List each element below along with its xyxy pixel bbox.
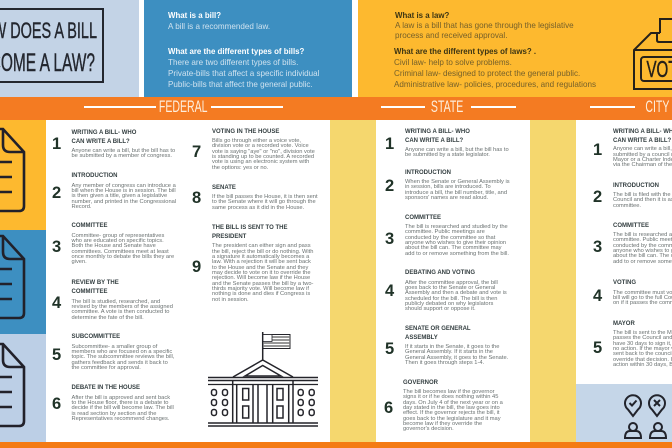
step: state 5: 5 <box>385 340 394 358</box>
step: federal 9: and the Senate passes the bill by a two- <box>212 281 313 287</box>
panel: what is a bill: What are the different types of bills? <box>168 46 304 56</box>
step: state 1: 1 <box>385 135 394 153</box>
step: state 2 <box>385 170 510 201</box>
panel: what is a law: What are the different types of laws? . <box>394 46 536 56</box>
step: federal 6: decide if the bill will become law. The bill <box>72 405 174 411</box>
step: state 5: If it starts in the Senate, it goes to the <box>405 344 499 350</box>
step: federal 3: Committee- group of representatives <box>72 233 164 239</box>
step: state 1 <box>385 128 509 158</box>
step: federal 1: WRITING A BILL- WHO <box>72 130 136 136</box>
step: state 4: should support or oppose it. <box>405 306 476 312</box>
step: state 1: Anyone can write a bill, but the bill has to <box>405 147 509 153</box>
step: state 6: signs it or if he does nothing within 45 <box>403 394 498 400</box>
step: state 5: Then it goes through steps 1-4. <box>405 360 484 366</box>
step: state 4: DEBATING AND VOTING <box>405 270 475 276</box>
panel: what is a law: A law is a bill that has gone through the legislative <box>395 20 574 30</box>
step: state 6: days. On July 4 of the next year or on a <box>403 400 503 406</box>
step: federal 5: gathers feedback and sends it back to <box>72 360 168 366</box>
step: state 6: GOVERNOR <box>403 380 438 386</box>
step: federal 2: INTRODUCTION <box>72 172 118 178</box>
step: federal 4: 4 <box>52 294 61 312</box>
step: federal 1: be submitted by a member of congress. <box>72 153 172 159</box>
step: federal 8: to the Senate where it will go through the <box>212 199 316 205</box>
step: state 2: in session, bills are introduced. To <box>405 184 491 190</box>
step: state 4: scheduled for the bill. The bill is then <box>405 296 497 302</box>
step: state 1: WRITING A BILL- WHO <box>405 128 470 134</box>
step: federal 6: is read section by section and the <box>72 411 156 417</box>
step: city 3: 3 <box>593 238 602 256</box>
panel: city voting icons <box>576 384 672 442</box>
step: city 3 <box>593 222 672 265</box>
step: federal 6: 6 <box>52 395 61 413</box>
step: state 3: COMMITTEE <box>405 214 441 220</box>
step: state 6: become law if they override the <box>403 421 482 427</box>
step: city 5: 5 <box>593 339 602 357</box>
step: state 2: When the Senate or General Assembly is <box>405 179 510 185</box>
step: federal 2: Record. <box>72 204 92 210</box>
step: federal 3: given. <box>72 259 87 265</box>
step: city 1 <box>593 128 672 168</box>
step: federal 9: law. With a rejection it will be sent back <box>212 259 311 265</box>
step: state 3: committee. Public meetings are <box>405 229 485 235</box>
step: federal 9: may decide to vote on it to override the <box>212 270 311 276</box>
step: federal 2: 2 <box>52 184 61 202</box>
panel: title background <box>0 0 139 97</box>
step: state 6: day stated in the bill, the law goes into <box>403 405 500 411</box>
step: federal 6 <box>52 384 174 422</box>
step: city 2: committee. <box>613 203 641 209</box>
step: federal 1: 1 <box>52 135 61 153</box>
step: federal 8: 8 <box>192 189 201 207</box>
step: federal 6: After the bill is approved and sent back <box>72 395 170 401</box>
step: city 4 <box>593 280 672 306</box>
panel: what is a bill <box>144 0 352 97</box>
step: state 2: 2 <box>385 177 394 195</box>
panel: what is a law: process and received approval. <box>395 31 507 40</box>
step: federal 3: who are educated on specific topics. <box>72 238 164 244</box>
step: federal 1 <box>52 130 175 159</box>
heading: federal: FEDERAL <box>159 97 208 116</box>
step: federal 2: bill when the House is in session. The bill <box>72 188 176 194</box>
step: federal 3: once monthly to debate the bills they are <box>72 254 174 260</box>
step: federal 9: thirds majority vote. Will become law if <box>212 286 309 292</box>
step: state 2: INTRODUCTION <box>405 170 451 176</box>
step: federal 9: a signature it automatically becomes a <box>212 254 309 260</box>
step: federal 9: not in session. <box>212 297 249 303</box>
step: state 4 <box>385 270 507 312</box>
step: state 4: Assembly and then a debate and vote is <box>405 290 507 296</box>
step: city 3: COMMITTEE <box>613 222 649 228</box>
step: federal 2 <box>52 172 176 210</box>
step: city 5: MAYOR <box>613 320 635 326</box>
step: state 2: introduce a bill, the bill number, title, and <box>405 190 507 196</box>
step: federal 1: Anyone can write a bill, but the bill has to <box>72 148 175 154</box>
step: state 4: 4 <box>385 282 394 300</box>
step: federal 9: PRESIDENT <box>212 234 246 240</box>
step: federal 9: THE BILL IS SENT TO THE <box>212 224 287 230</box>
step: federal 5: the committee for approval. <box>72 365 141 371</box>
step: federal 9 <box>192 224 314 303</box>
heading: city: CITY <box>645 97 669 116</box>
band: bottom strip <box>0 442 672 448</box>
step: state 3: add to or remove something from the bill. <box>405 251 509 257</box>
step: federal 7: division vote or a recorded vote. Voice <box>212 143 309 149</box>
band: section header strip <box>0 97 672 120</box>
step: federal 9: nothing is done and dies if Congress is <box>212 291 310 297</box>
step: state 4: After the committee approval, the bill <box>405 280 498 286</box>
step: federal 5: Subcommittee- a smaller group of <box>72 344 157 350</box>
step: state 6 <box>384 380 503 432</box>
step: state 3: 3 <box>385 230 394 248</box>
step: federal 8: If the bill passes the House, it is then sent <box>212 194 318 200</box>
panel: what is a law: Criminal law- designed to protect the general public. <box>394 68 580 78</box>
step: federal 2: number, and printed in the Congressional <box>72 199 176 205</box>
panel: what is a law <box>358 0 672 97</box>
step: federal 5: SUBCOMMITTEE <box>72 334 120 340</box>
step: federal 4: revised by the members of the assigned <box>72 304 173 310</box>
step: federal 9: rejection. Will become law if the House <box>212 275 310 281</box>
step: federal 7: vote is using an electronic system with <box>212 159 309 165</box>
step: federal 5: 5 <box>52 346 61 364</box>
step: state 5: General Assembly. If it starts in the <box>405 349 493 355</box>
title <box>0 8 104 83</box>
step: state 5: ASSEMBLY <box>405 334 438 340</box>
icon: capitol building with flag <box>208 332 318 427</box>
step: federal 7: Bills go through either a voice vote, <box>212 138 301 144</box>
step: federal 5: topic. The subcommittee reviews the bill, <box>72 354 174 360</box>
panel: what is a law: What is a law? <box>395 10 449 20</box>
step: federal 8: SENATE <box>212 184 236 190</box>
step: federal 5: members who are focused on a specific <box>72 349 172 355</box>
step: federal 6: to the House floor, there is a debate to <box>72 400 168 406</box>
panel: what is a bill: There are two different types of bills. <box>168 58 298 66</box>
step: state 3: about the bill can. The committee may <box>405 245 502 251</box>
step: city 4: 4 <box>593 287 602 305</box>
step: federal 3: COMMITTEE <box>72 222 108 228</box>
step: federal 7: 7 <box>192 143 201 161</box>
step: federal 9: The president can either sign and pass <box>212 243 311 249</box>
step: federal 2: is then given a title, given a legislative <box>72 193 167 199</box>
step: city 2: 2 <box>593 188 602 206</box>
step: city 5 <box>593 320 672 368</box>
panel: what is a bill: Public-bills that affect the general public. <box>168 80 313 88</box>
step: state 3: anyone who wishes to give their opinion <box>405 240 506 246</box>
step: federal 7 <box>192 128 315 171</box>
step: city 4: VOTING <box>613 280 636 286</box>
step: state 3 <box>385 214 509 257</box>
step: city 1: 1 <box>593 141 602 159</box>
divider strip: federal to state <box>330 120 376 442</box>
panel: what is a bill: A bill is a recommended law. <box>168 22 270 30</box>
step: state 6: 6 <box>384 399 393 417</box>
step: federal 3: 3 <box>52 238 61 256</box>
step: city 1: CAN WRITE A BILL? <box>613 138 671 144</box>
step: federal 4: committee. A vote is then conducted to <box>72 309 169 315</box>
step: federal 3: committees. Committees meet at least <box>72 249 169 255</box>
step: federal 5 <box>52 334 174 371</box>
heading: state: STATE <box>431 97 464 116</box>
step: federal 8: same process as it did in the House. <box>212 205 304 211</box>
icon: ballot box <box>633 18 672 90</box>
step: federal 7: vote is saying "aye" or "no", division vote <box>212 149 315 155</box>
step: state 1: be submitted by a state legislator. <box>405 152 490 158</box>
step: federal 4 <box>52 280 173 321</box>
step: federal 4: determine the fate of the bill. <box>72 315 144 321</box>
step: state 6: The bill becomes law if the governor <box>403 389 495 395</box>
step: state 6: governor's decision. <box>403 426 454 432</box>
step: federal 6: DEBATE IN THE HOUSE <box>72 384 140 390</box>
step: federal 3 <box>52 222 174 265</box>
step: state 5 <box>385 326 508 366</box>
step: state 6: effect. If the governor rejects the bill, it <box>403 410 500 416</box>
step: federal 4: COMMITTEE <box>72 288 108 294</box>
step: federal 4: The bill is studied, researched, and <box>72 299 160 305</box>
step: federal 3: Both the House and Senate have <box>72 243 156 249</box>
step: city 2 <box>593 182 672 209</box>
panel: blue document icon <box>0 230 46 334</box>
step: state 2: sponsors' names are read aloud. <box>405 195 488 201</box>
panel: what is a law: Civil law- help to solve problems. <box>394 58 512 66</box>
step: federal 4: REVIEW BY THE <box>72 280 119 286</box>
step: federal 7: VOTING IN THE HOUSE <box>212 128 279 134</box>
divider strip: state to city <box>530 120 576 442</box>
step: federal 9: to the House and the Senate and they <box>212 265 308 271</box>
step: state 3: conducted by the committee so that <box>405 235 495 241</box>
panel: light blue document icon <box>0 334 46 442</box>
step: state 5: SENATE OR GENERAL <box>405 326 471 332</box>
step: federal 1: CAN WRITE A BILL? <box>72 138 130 144</box>
panel: what is a law: Administrative law- policies, procedures, and regulations <box>394 80 596 88</box>
step: state 1: CAN WRITE A BILL? <box>405 138 463 144</box>
step: state 4: publicly debated on why legislators <box>405 301 493 307</box>
panel: what is a bill: Private-bills that affect a specific individual <box>168 68 319 78</box>
panel: yellow document icon <box>0 120 46 230</box>
step: federal 8 <box>192 184 318 211</box>
step: state 4: goes back to the Senate or General <box>405 285 495 291</box>
step: state 3: The bill is researched and studied by the <box>405 224 508 230</box>
step: federal 2: Any member of congress can introduce a <box>72 183 176 189</box>
panel: what is a bill: What is a bill? <box>168 10 221 20</box>
step: federal 9: the bill, reject the bill or do nothing. With <box>212 249 313 255</box>
step: federal 7: is standing up to be counted. A recorded <box>212 154 314 160</box>
step: federal 7: the options: yes or no. <box>212 165 268 171</box>
step: federal 9: 9 <box>192 258 201 276</box>
step: city 2: INTRODUCTION <box>613 182 659 188</box>
step: state 5: General Assembly, it goes to the Senate. <box>405 355 508 361</box>
step: federal 6: Representatives recommend changes. <box>72 416 169 422</box>
step: state 6: goes back to the legislature and it may <box>403 416 501 422</box>
